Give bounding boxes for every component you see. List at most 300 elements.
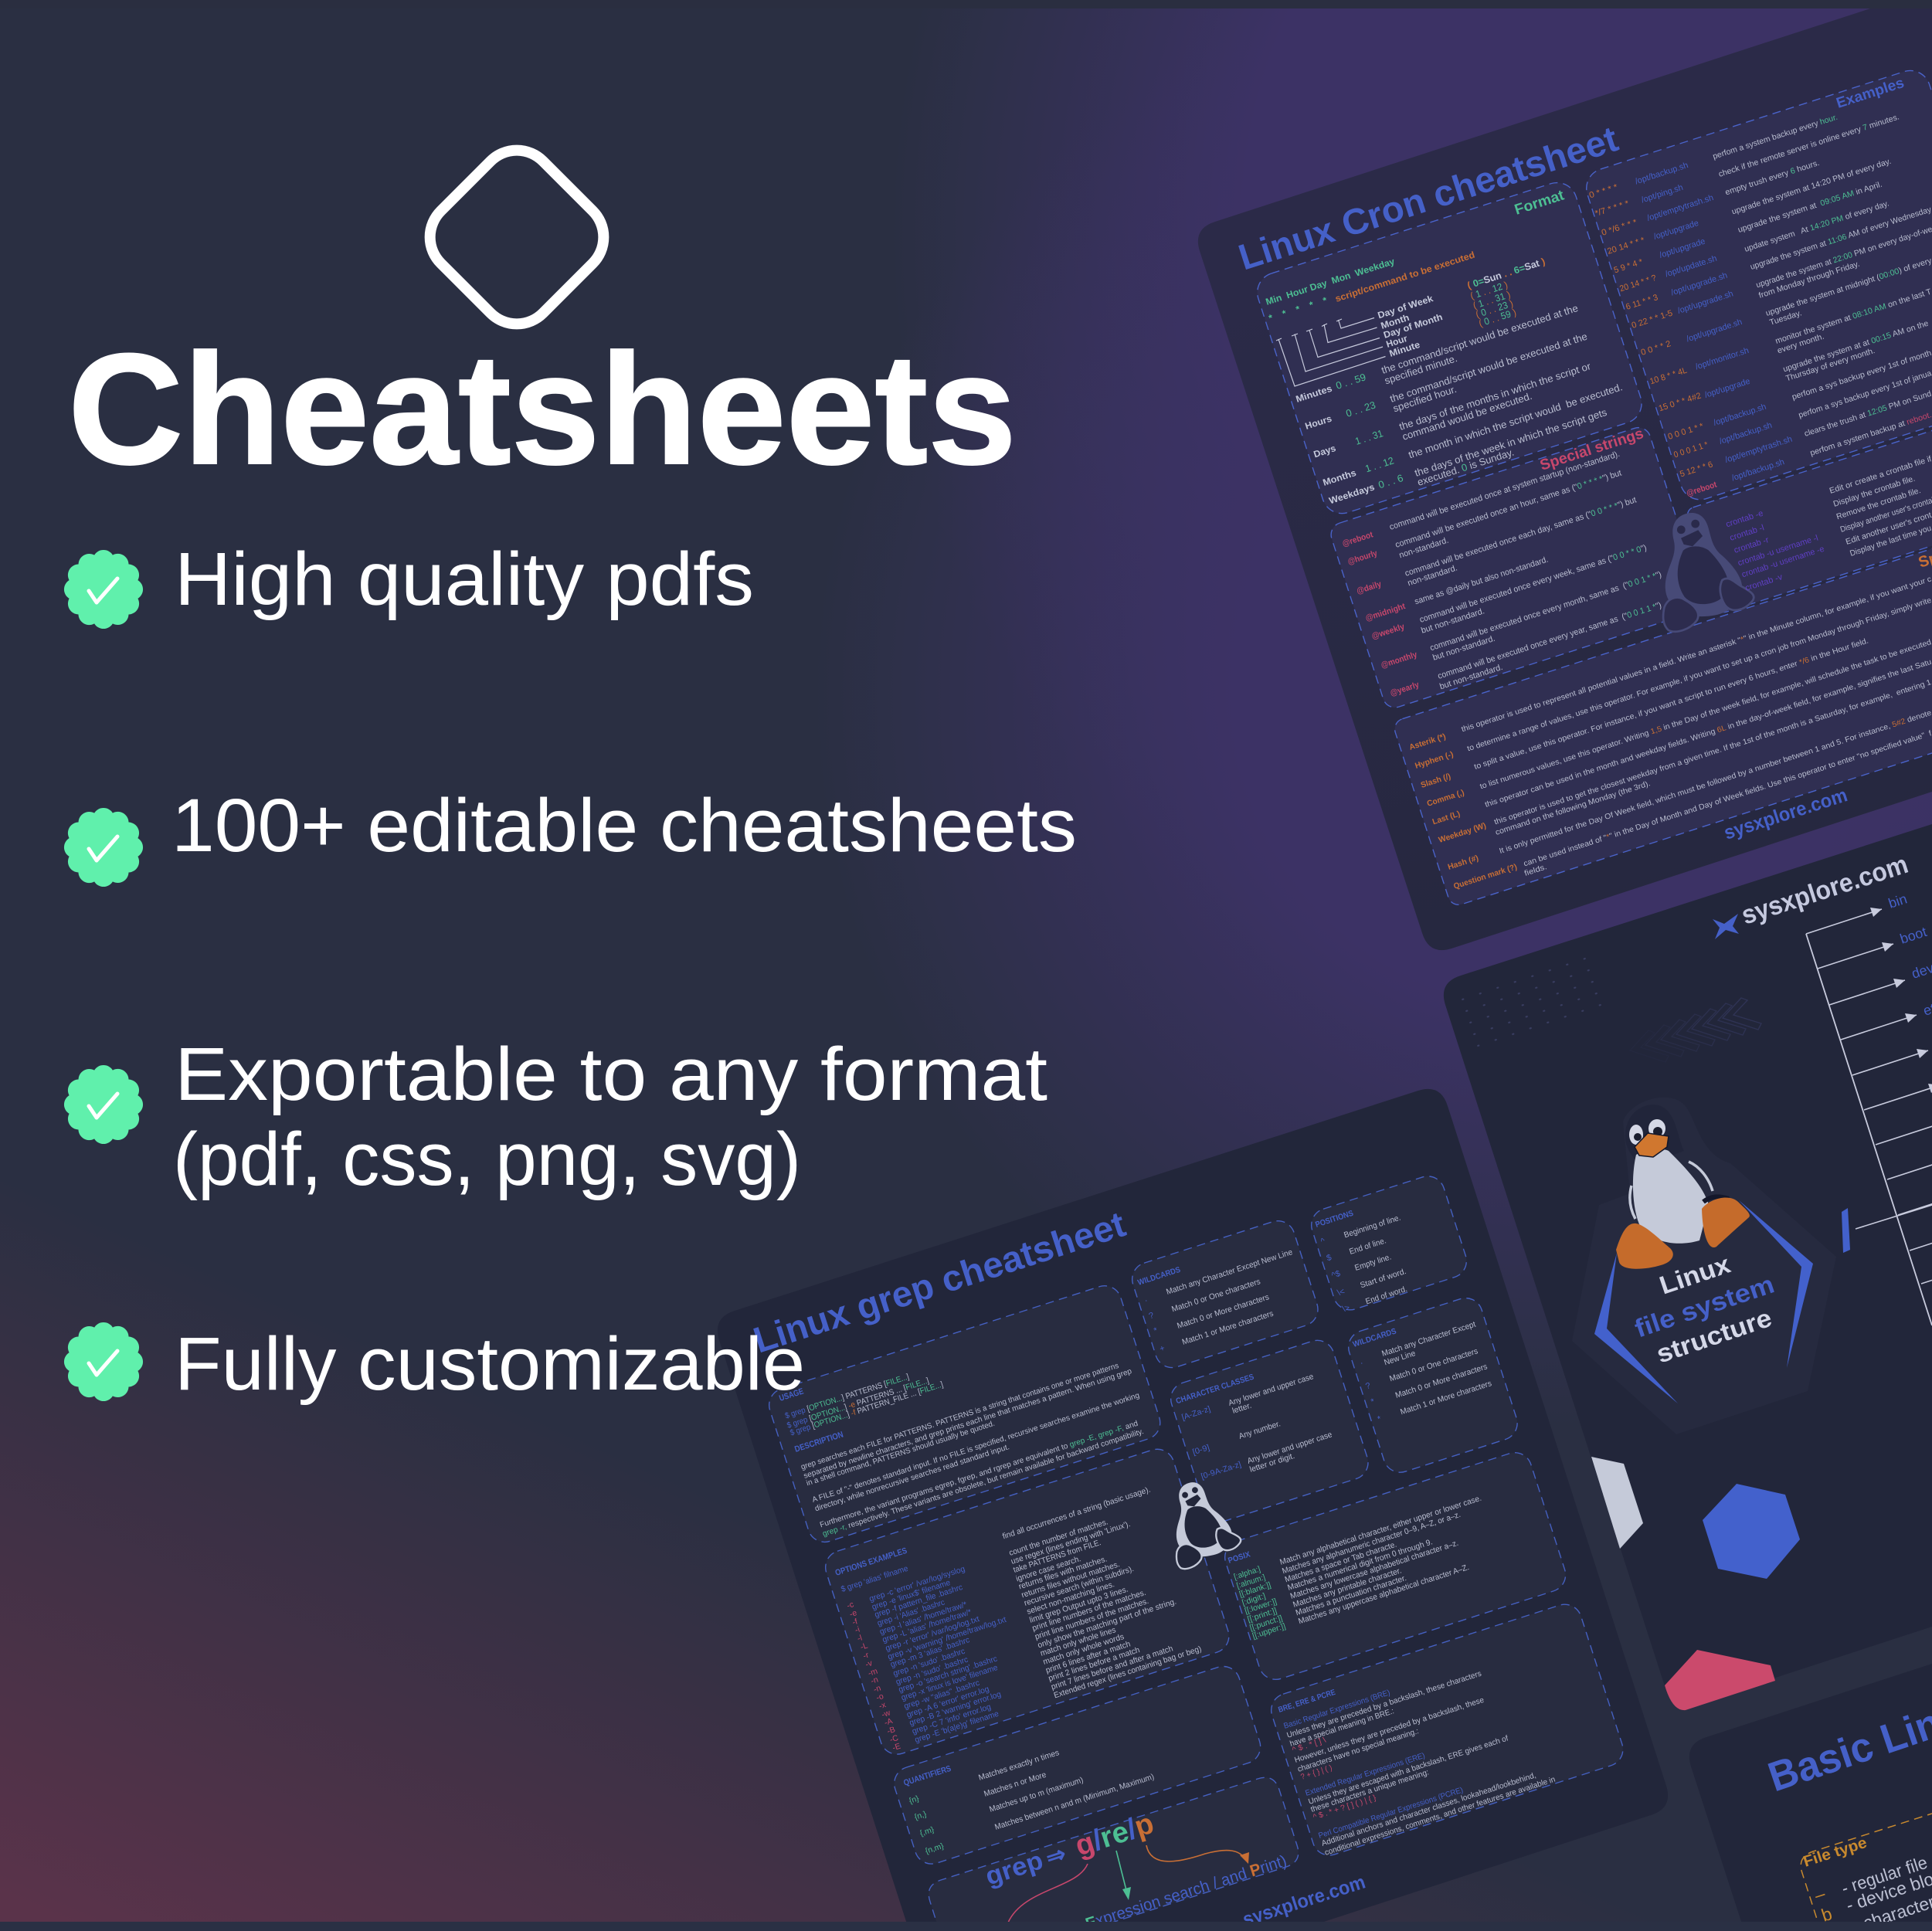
examples panel text: /opt/update.sh <box>1664 254 1718 279</box>
wildcards, positions, classes, posix text: Empty line. <box>1354 1253 1393 1273</box>
options examples text: grep -e 'linux$' filename <box>871 1579 952 1612</box>
wildcards, positions, classes, posix text: End of line. <box>1349 1237 1387 1257</box>
special strings panel text: command will be executed once every year, same as ("0 0 1 1 *") <box>1437 601 1662 681</box>
special strings panel text: @daily <box>1356 579 1384 596</box>
special strings panel text: command will be executed once every week, same as ("0 0 * * 0") <box>1418 543 1648 625</box>
wildcards, positions, classes, posix text: New Line <box>1384 1349 1417 1367</box>
wildcards, positions, classes, posix text: Matches any uppercase alphabetical character A–Z. <box>1298 1563 1470 1626</box>
wildcards, positions, classes, posix text: * <box>1377 1414 1383 1424</box>
format panel text: ( 0=Sun . . 6=Sat ) <box>1466 256 1547 291</box>
directory tree: bin <box>1886 891 1909 911</box>
file type section: - regular file <box>1839 1852 1930 1899</box>
examples panel text: Tuesday. <box>1769 309 1803 327</box>
website label: sysxplore.com <box>1240 1872 1368 1931</box>
crontab panel text: Edit or create a crontab file if <box>1828 455 1932 496</box>
examples panel text: /opt/upgrade <box>1703 377 1751 400</box>
badge text: Linux <box>1655 1249 1734 1300</box>
options examples text: select non-matching lines. <box>1026 1580 1115 1617</box>
BRE, ERE and PCRE text <box>1278 1670 1557 1858</box>
special strings panel text: command will be executed once an hour, same as ("0 * * * *") but <box>1394 468 1623 550</box>
icon: small penguin <box>1160 1474 1244 1570</box>
format panel text: Day of Week <box>1377 293 1435 321</box>
options examples text: find all occurrences of a string (basic usage). <box>1002 1486 1152 1541</box>
format panel text: * * * * * <box>1268 294 1329 324</box>
BRE, ERE and PCRE text: Perl Compatible Regular Expressions (PCRE) <box>1318 1786 1465 1841</box>
format panel text: script/command to be executed <box>1334 249 1476 304</box>
examples panel text: Thursday of every month. <box>1785 347 1876 383</box>
file type section: b <box>1819 1903 1835 1926</box>
BRE, ERE and PCRE text: ^ $ . * [ ] \ <box>1292 1736 1327 1755</box>
quantifiers text: Matches up to m (maximum) <box>989 1777 1085 1814</box>
format panel text: 1 . . 12 <box>1363 454 1395 474</box>
special strings panel text: command will be executed once every month, same as ("0 0 1 * *") <box>1429 570 1662 653</box>
operators panel text: to determine a range of values, use this operator. For example, if you want to set up a cron job from Monday through Friday, simply write <box>1466 596 1932 753</box>
examples panel text: empty trush every 6 hours. <box>1724 159 1821 197</box>
wildcards, positions, classes, posix text: [A-Za-z] <box>1181 1405 1212 1422</box>
wildcards, positions, classes, posix text: Matches any lowercase alphabetical character a–z. <box>1289 1539 1459 1601</box>
directory tree <box>1806 891 1932 1325</box>
wildcards, positions, classes, posix text: Match any Character Except <box>1381 1320 1477 1359</box>
format panel text: Days <box>1312 443 1337 460</box>
BRE, ERE and PCRE text: BRE, ERE & PCRE <box>1278 1688 1336 1715</box>
options examples text: -E <box>891 1743 901 1753</box>
options examples text: print 6 lines after a match <box>1045 1640 1132 1675</box>
hexagon badge <box>1572 1098 1836 1434</box>
special strings panel text: non-standard. <box>1398 536 1450 560</box>
format panel text: the days of the months in which the script or <box>1397 360 1593 433</box>
wildcards, positions, classes, posix text: [:alnum:] <box>1236 1573 1267 1590</box>
options examples text: grep -E 'b(a|e)g' filename <box>914 1710 1000 1745</box>
bullet: editable cheatsheets <box>56 783 1077 894</box>
format panel text: Day of Month <box>1382 311 1444 341</box>
examples panel text: 0 22 * * 1-5 <box>1631 309 1674 331</box>
options examples text: match only whole words <box>1042 1633 1126 1667</box>
quantifiers text: Matches n or More <box>983 1771 1047 1799</box>
options examples text: grep -c 'error' /var/log/syslog <box>868 1565 966 1604</box>
usage and description text: grep searches each FILE for PATTERNS. PATTERNS is a string that contains one or more patterns <box>800 1362 1120 1471</box>
usage and description text: A FILE of "-" denotes standard input. If no FILE is specified, recursive searches examine the working <box>811 1391 1141 1505</box>
examples panel text: /opt/emptytrash.sh <box>1724 435 1794 465</box>
options examples text: -L <box>860 1641 869 1652</box>
format panel text: 0 . . 59 <box>1334 371 1367 392</box>
options examples text: grep -o 'search string' .bashrc <box>898 1655 999 1695</box>
file type section: File type <box>1801 1834 1869 1871</box>
bullet: high quality pdfs: High quality pdfs <box>175 537 754 621</box>
special strings panel text: but non-standard. <box>1420 606 1486 636</box>
BRE, ERE and PCRE text: Unless they are escaped with a backslash, ERE gives each of <box>1308 1734 1509 1807</box>
format panel text: Minute <box>1388 339 1421 359</box>
options examples text: grep -B 2 'warning' error.log <box>908 1690 1003 1728</box>
options examples text: -f <box>851 1617 859 1627</box>
bullet: exportable: Exportable to any format <box>175 1032 1047 1116</box>
format heading: Format <box>1513 187 1567 219</box>
operators panel text: to list numerous values, use this operator. Writing 1,5 in the Day of the week field, for example, will schedule the task to be executed <box>1479 638 1932 791</box>
options examples text: OPTIONS EXAMPLES <box>834 1546 908 1578</box>
title: Linux grep cheatsheet: Linux grep cheatsheet <box>749 1203 1130 1361</box>
examples panel text: 15 0 * * 4#2 <box>1658 391 1703 413</box>
operators panel text: this operator is used to get the closest weekday from a given time. If the 1st of the month is a Saturday, for example, entering 1 <box>1493 678 1932 826</box>
wildcards, positions, classes, posix text: Match 0 or More characters <box>1177 1293 1270 1331</box>
BRE, ERE and PCRE text: characters have no special meaning.: <box>1297 1727 1420 1774</box>
options examples text: grep -A 6 'error' error.log <box>906 1685 990 1719</box>
examples panel text: 20 14 * * ? <box>1618 273 1658 294</box>
options examples text: -e <box>849 1609 858 1619</box>
options examples text: -m <box>868 1668 879 1678</box>
panel: Linux grep cheatsheet card <box>718 1089 1668 1931</box>
wildcards, positions, classes, posix text: * <box>1370 1396 1377 1407</box>
operators panel text: Hash (#) <box>1447 854 1479 872</box>
wildcards, positions, classes, posix text: End of word. <box>1365 1285 1408 1306</box>
usage and description text: $ grep [OPTION...] -f PATTERN_FILE ... [FILE...] <box>789 1380 945 1437</box>
panel: Basic Linux card <box>1689 1664 1932 1931</box>
crontab panel text: Edit another user's cront <box>1845 511 1932 547</box>
quantifiers text: {n,m} <box>925 1842 946 1856</box>
BRE, ERE and PCRE text: conditional expressions, comments, and other features are available in <box>1324 1776 1557 1858</box>
crontab panel text: crontab -r <box>1733 535 1770 555</box>
format panel text: the month in which the script would be executed. <box>1407 381 1624 460</box>
wildcards, positions, classes, posix text: ^ <box>1319 1237 1327 1247</box>
options examples text: grep -i 'Alias' .bashrc <box>877 1599 946 1628</box>
badge text <box>1631 1249 1778 1369</box>
quantifiers text <box>902 1749 1156 1856</box>
wildcards, positions, classes, posix text: Start of word. <box>1360 1268 1407 1290</box>
examples panel text: upgrade the system at 09:05 AM in April. <box>1737 181 1883 235</box>
BRE, ERE and PCRE text: Additional anchors and character classes, lookahead/lookbehind, <box>1321 1771 1537 1848</box>
options examples text: ignore case search. <box>1015 1555 1082 1583</box>
options examples text: -o <box>875 1692 885 1702</box>
website label: sysxplore.com <box>1721 784 1850 844</box>
penguin mascot <box>1616 1105 1750 1269</box>
options examples text: print line numbers of the matches. <box>1034 1597 1150 1641</box>
wildcards, positions, classes, posix text: WILDCARDS <box>1137 1266 1182 1288</box>
format panel text: Minutes <box>1295 383 1333 405</box>
wildcards, positions, classes, posix text: \< <box>1336 1287 1346 1298</box>
panel: Linux Cron cheatsheet card <box>1198 0 1932 950</box>
options examples text: -l <box>857 1634 863 1644</box>
wildcards, positions, classes, posix text: Any number. <box>1238 1420 1282 1441</box>
operators panel text: to split a value, use this operator. For instance, if you want a script to run every 6 hours, enter */6 in the Hour field. <box>1473 637 1869 772</box>
special strings panel text: @midnight <box>1364 602 1407 623</box>
usage and description text: in a shell command, PATTERNS should usually be quoted. <box>806 1420 996 1488</box>
quantifiers text: {n} <box>908 1794 921 1806</box>
format panel text: Month <box>1380 312 1411 331</box>
usage and description text: $ grep [OPTION...] -e PATTERNS ... [FILE...] <box>786 1376 930 1430</box>
wildcards, positions, classes, posix text: ? <box>1364 1381 1372 1391</box>
operators panel text: Weekday (W) <box>1438 822 1487 845</box>
operators panel text: this operator is used to represent all potential values in a field. Write an asterisk " *" in the Minute column, for example, if you want your c <box>1461 575 1932 734</box>
examples panel text: 0 * * * * <box>1588 182 1619 200</box>
file type section: – <box>1812 1883 1828 1906</box>
options examples text: returns files with matches. <box>1018 1555 1109 1591</box>
operators panel text: Last (L) <box>1431 810 1462 826</box>
examples panel text <box>1588 75 1932 498</box>
BRE, ERE and PCRE text: Unless they are preceded by a backslash, these characters <box>1286 1670 1482 1740</box>
wildcards, positions, classes, posix text: Match any Character Except New Line <box>1166 1248 1294 1297</box>
BRE, ERE and PCRE text: ^ $ . * + ? [ ] ( ) | { } <box>1312 1794 1377 1822</box>
BRE, ERE and PCRE text: these characters a unique meaning: <box>1310 1768 1430 1814</box>
bullet: editable cheatsheets: 100+ editable cheatsheets <box>171 783 1077 867</box>
format panel text: ( 0 . . 59 ) <box>1478 307 1518 329</box>
wildcards, positions, classes, posix text: Matches any alphanumeric character 0–9, A–Z, or a–z. <box>1282 1511 1462 1576</box>
quantifiers text: QUANTIFIERS <box>902 1764 952 1788</box>
wildcards, positions, classes, posix text: Matches a numerical digit from 0 through 9. <box>1287 1538 1434 1593</box>
grep name diagram: g/re/p <box>1071 1807 1158 1863</box>
options examples text: print line numbers of the matches. <box>1031 1589 1147 1633</box>
examples panel text: /opt/ping.sh <box>1640 183 1684 205</box>
format panel text: Hours <box>1304 413 1333 432</box>
grep name diagram: grep <box>982 1845 1046 1891</box>
quantifiers text: Matches exactly n times <box>978 1749 1061 1783</box>
special strings panel text: @weekly <box>1370 622 1407 641</box>
special strings panel text: but non-standard. <box>1438 663 1504 691</box>
grep name diagram: Expression search / and Print) <box>1083 1852 1289 1931</box>
wildcards, positions, classes, posix text <box>1137 1210 1492 1641</box>
wildcards, positions, classes, posix text: $ <box>1326 1253 1333 1263</box>
wildcards, positions, classes, posix text: Matches a space or Tab characte. <box>1284 1541 1398 1584</box>
quantifiers text: Matches between n and m (Minimum, Maximum) <box>994 1773 1156 1832</box>
options examples text: -C <box>889 1734 900 1745</box>
examples panel text: 5 9 * 4 * <box>1613 257 1645 275</box>
wildcards, positions, classes, posix text: WILDCARDS <box>1352 1327 1397 1349</box>
crontab panel text: crontab -u username -l <box>1737 534 1819 568</box>
wildcards, positions, classes, posix text: Match any alphabetical character, either upper or lower case. <box>1279 1495 1482 1567</box>
BRE, ERE and PCRE text: Extended Regular Expressions (ERE) <box>1305 1752 1426 1798</box>
operators panel text: Slash (/) <box>1420 772 1452 790</box>
options examples text: -x <box>878 1701 888 1711</box>
options examples text: -B <box>886 1726 896 1736</box>
panel: Linux file system card <box>1444 824 1932 1710</box>
wildcards, positions, classes, posix text: Matches a punctuation character. <box>1295 1574 1407 1617</box>
crontab panel text: Remove the crontab file. <box>1835 487 1922 521</box>
usage and description text: USAGE <box>778 1386 805 1403</box>
examples panel text: 0 0 0 1 * * <box>1667 422 1705 442</box>
operators panel text <box>1408 575 1932 891</box>
wildcards, positions, classes, posix text: [[:blank:]] <box>1238 1581 1272 1599</box>
special strings panel text: non-standard. <box>1407 563 1458 588</box>
badge text: structure <box>1652 1303 1775 1369</box>
options examples text: grep -C 7 'info' error.log <box>912 1703 992 1736</box>
examples panel text: /opt/emptytrash.sh <box>1646 193 1715 223</box>
examples panel text: 5 12 * * 6 <box>1679 460 1714 479</box>
wildcards, positions, classes, posix text: . <box>1359 1356 1363 1366</box>
usage and description text: directory, while nonrecursive searches read standard input. <box>814 1443 1010 1513</box>
wildcards, positions, classes, posix text: Beginning of line. <box>1343 1213 1402 1240</box>
BRE, ERE and PCRE text: have a special meaning in BRE.: <box>1289 1707 1395 1749</box>
options examples text: -r <box>862 1651 871 1661</box>
icon: rounded diamond logo <box>415 135 619 339</box>
examples panel text: /opt/backup.sh <box>1730 457 1786 483</box>
options examples text: count the number of matches. <box>1008 1518 1109 1558</box>
crontab panel text: Display the crontab file. <box>1832 475 1917 509</box>
format panel text: the command/script would be executed at the <box>1388 331 1589 405</box>
operators panel text: this operator can be used in the month and weekday fields. Writing 6L in the day-of-week field, for example, signifies the last Satu <box>1484 658 1932 809</box>
badge text: file system <box>1631 1269 1778 1343</box>
wildcards, positions, classes, posix text: [0-9A-Za-z] <box>1200 1461 1242 1481</box>
usage and description text <box>778 1362 1145 1539</box>
quantifiers text: {n,} <box>914 1810 928 1822</box>
BRE, ERE and PCRE text: ? + { } | ( ) <box>1300 1764 1333 1782</box>
options examples text: grep -r 'error' /var/log/log.txt <box>885 1615 980 1653</box>
feature list <box>56 537 1077 1409</box>
examples panel text: upgrade the system at 14:20 PM of every day. <box>1731 158 1893 216</box>
format panel text: Weekdays <box>1328 481 1376 506</box>
usage and description text: Furthermore, the variant programs egrep, fgrep, and rgrep are equivalent to grep -E, grep -F, and <box>819 1420 1139 1529</box>
examples panel text: /opt/upgrade.sh <box>1670 271 1729 297</box>
options examples text: print 2 lines before a match <box>1047 1646 1141 1683</box>
title: Cheatsheets <box>68 321 1017 497</box>
format panel text: 1 . . 31 <box>1353 427 1384 447</box>
options examples text: grep -n 'sudo' .bashrc <box>892 1648 966 1678</box>
examples panel text: /opt/backup.sh <box>1718 421 1774 446</box>
icon: faint penguin <box>1646 504 1757 633</box>
examples panel text: /opt/upgrade <box>1659 237 1706 260</box>
blue bar <box>1842 1208 1850 1253</box>
special strings panel text: @hourly <box>1346 548 1379 567</box>
format panel text: the command/script would be executed at the <box>1380 302 1580 376</box>
format panel text: 0 . . 23 <box>1344 399 1377 419</box>
quantifiers text: {,m} <box>919 1826 935 1838</box>
wildcards, positions, classes, posix text: [[:punct:]] <box>1249 1614 1284 1633</box>
options examples text: match only whole lines <box>1040 1626 1117 1658</box>
format panel text: the days of the week in which the script gets <box>1413 406 1608 479</box>
format panel text: specified minute. <box>1383 352 1458 386</box>
examples panel text: 0 0 0 1 1 * <box>1672 440 1710 460</box>
operators panel text: command on the following Monday (the 3rd). <box>1495 779 1652 837</box>
examples panel text: /opt/upgrade.sh <box>1686 317 1744 344</box>
bullet: exportable: (pdf, css, png, svg) <box>173 1117 801 1201</box>
examples panel text: /opt/backup.sh <box>1713 402 1767 428</box>
logo icon <box>1713 914 1739 939</box>
usage and description text: DESCRIPTION <box>793 1430 844 1454</box>
examples panel text: perfom a sys backup every 1st of janua <box>1798 369 1932 420</box>
operators panel text: It is only permitted for the Day Of Week field, which must be followed by a number between 1 and 5. For instance, 5#2 denote <box>1499 709 1932 856</box>
wildcards, positions, classes, posix text: Match 0 or More characters <box>1394 1363 1489 1400</box>
dot grid <box>1452 950 1615 1050</box>
special strings panel text: command will be executed once each day, same as ("0 0 * * *") but <box>1404 495 1638 579</box>
options examples text: print 7 lines before and after a match <box>1051 1644 1174 1692</box>
options examples text: -c <box>846 1600 855 1610</box>
wildcards, positions, classes, posix text: Match 1 or More characters <box>1400 1380 1492 1417</box>
options examples text: grep -l 'alias' /home/traw/* <box>879 1600 968 1637</box>
options examples text: only show the matching part of the string. <box>1037 1597 1177 1650</box>
options examples text: -i <box>854 1626 861 1635</box>
grep name diagram <box>982 1807 1289 1931</box>
wildcards, positions, classes, posix text: Match 0 or One characters <box>1389 1347 1479 1383</box>
operators panel text: Question mark (?) <box>1453 863 1518 891</box>
options examples text: grep -L 'alias' /home/traw/* <box>881 1608 973 1644</box>
wildcards, positions, classes, posix text: Matches any printable character. <box>1292 1566 1403 1610</box>
options examples text: take PATTERNS from FILE. <box>1013 1539 1102 1575</box>
crontab panel text: crontab -l <box>1729 523 1765 543</box>
wildcards, positions, classes, posix text: + <box>1159 1343 1166 1354</box>
file type section <box>1801 1814 1932 1931</box>
format panel text: ( 0 . . 23 ) <box>1475 298 1515 320</box>
grep name diagram: ⇒ <box>1043 1841 1069 1872</box>
format panel text: command would be executed. <box>1401 390 1533 443</box>
usage and description text: separated by newline characters, and grep prints each line that matches a pattern. When using grep <box>803 1367 1133 1481</box>
options examples text: -A <box>884 1717 894 1728</box>
wildcards, positions, classes, posix text: Any lower and upper case <box>1227 1373 1315 1408</box>
crontab panel text <box>1725 455 1932 593</box>
examples panel text: /opt/backup.sh <box>1634 161 1689 186</box>
BRE, ERE and PCRE text: Basic Regular Expressions (BRE) <box>1283 1688 1391 1731</box>
wildcards, positions, classes, posix text: POSITIONS <box>1315 1210 1354 1230</box>
examples panel text: upgrade the system at 11:06 AM of every Wednesday <box>1750 205 1932 272</box>
options examples text: -n <box>870 1675 879 1686</box>
usage and description text: $ grep [OPTION...] PATTERNS [FILE...] <box>784 1373 910 1420</box>
examples panel text: clears the trush at 12:05 PM on Sund <box>1804 390 1932 439</box>
wildcards, positions, classes, posix text: CHARACTER CLASSES <box>1175 1373 1255 1406</box>
wildcards, positions, classes, posix text: Any lower and upper case <box>1247 1430 1333 1466</box>
wildcards, positions, classes, posix text: ? <box>1148 1311 1155 1321</box>
format panel text: 0 . . 6 <box>1377 472 1404 490</box>
examples panel text: */7 * * * * <box>1594 199 1631 219</box>
format panel text: Hour <box>1385 333 1409 350</box>
examples panel text: /opt/upgrade <box>1652 219 1700 242</box>
examples panel text: 6 11 * * 3 <box>1625 293 1659 312</box>
options examples text: recursive search (within subdirs). <box>1024 1565 1135 1608</box>
wildcards, positions, classes, posix text: [0-9] <box>1192 1444 1210 1457</box>
examples panel text: perfom a sys backup every 1st of month <box>1791 349 1932 402</box>
format panel text: executed. 0 is Sunday. <box>1416 446 1516 488</box>
format panel text: ( 1 . . 12 ) <box>1469 280 1509 301</box>
wildcards, positions, classes, posix text: [:digit:] <box>1241 1592 1267 1607</box>
logo text: sysxplore.com <box>1738 850 1912 931</box>
examples panel text: every month. <box>1777 333 1825 355</box>
title: Linux Cron cheatsheet: Linux Cron cheatsheet <box>1234 117 1623 278</box>
options examples text: grep -v 'warning' /home/traw/log.txt <box>887 1616 1007 1661</box>
options examples text: $ grep 'alias' filname <box>840 1565 909 1594</box>
bullet: high quality pdfs <box>56 537 754 636</box>
wildcards, positions, classes, posix text: letter. <box>1231 1402 1253 1416</box>
wildcards, positions, classes, posix text: * <box>1153 1325 1160 1335</box>
wildcards, positions, classes, posix text: Match 0 or One characters <box>1171 1278 1261 1314</box>
examples panel text: monitor the system at 08:10 AM on the last T <box>1774 287 1932 346</box>
options examples text: grep -f pattern_file .bashrc <box>874 1583 964 1620</box>
examples panel text: upgrade the system at at 00:15 AM on the <box>1782 320 1930 374</box>
options examples text: grep -m 3 'alias' .bashrc <box>890 1636 971 1669</box>
format panel text <box>1265 249 1624 506</box>
examples panel text: /opt/upgrade.sh <box>1676 289 1734 316</box>
wildcards, positions, classes, posix text: . <box>1143 1294 1148 1304</box>
format panel text: specified hour. <box>1391 383 1458 414</box>
examples panel text: check if the remote server is online every 7 minutes. <box>1718 113 1900 179</box>
operators panel text: fields. <box>1523 863 1548 878</box>
special strings panel text: same as @daily but also non-standard. <box>1414 555 1550 606</box>
options examples text: use regex (lines ending with 'Linux'). <box>1010 1520 1132 1566</box>
wildcards, positions, classes, posix text: letter or digit. <box>1249 1452 1296 1475</box>
options examples text: -n <box>873 1684 882 1695</box>
special strings panel text: @reboot <box>1341 530 1374 548</box>
special strings panel text <box>1341 425 1662 698</box>
crontab panel text: crontab -e <box>1725 509 1764 529</box>
examples panel text: @reboot <box>1686 480 1718 498</box>
format panel text: Months <box>1322 467 1358 488</box>
examples panel text: 0 0 * * 2 <box>1640 339 1672 358</box>
examples panel text: 0 */6 * * * <box>1601 218 1638 238</box>
special strings panel text: Special strings <box>1538 425 1645 474</box>
BRE, ERE and PCRE text: However, unless they are preceded by a backslash, these <box>1294 1696 1486 1765</box>
wildcards, positions, classes, posix text: POSIX <box>1227 1550 1251 1566</box>
usage and description text: grep -r, respectively. These variants are obsolete, but remain available for backward compatibility. <box>822 1427 1145 1539</box>
wildcards, positions, classes, posix text: [[:lower:]] <box>1244 1597 1278 1616</box>
wildcards, positions, classes, posix text: ^$ <box>1330 1269 1342 1281</box>
examples panel text: 10 8 * * 4L <box>1648 366 1689 386</box>
wildcards, positions, classes, posix text: [[:print:]] <box>1247 1607 1278 1624</box>
special strings panel text: @yearly <box>1389 680 1421 698</box>
options examples text: -w <box>881 1709 891 1719</box>
options examples text <box>834 1486 1203 1753</box>
